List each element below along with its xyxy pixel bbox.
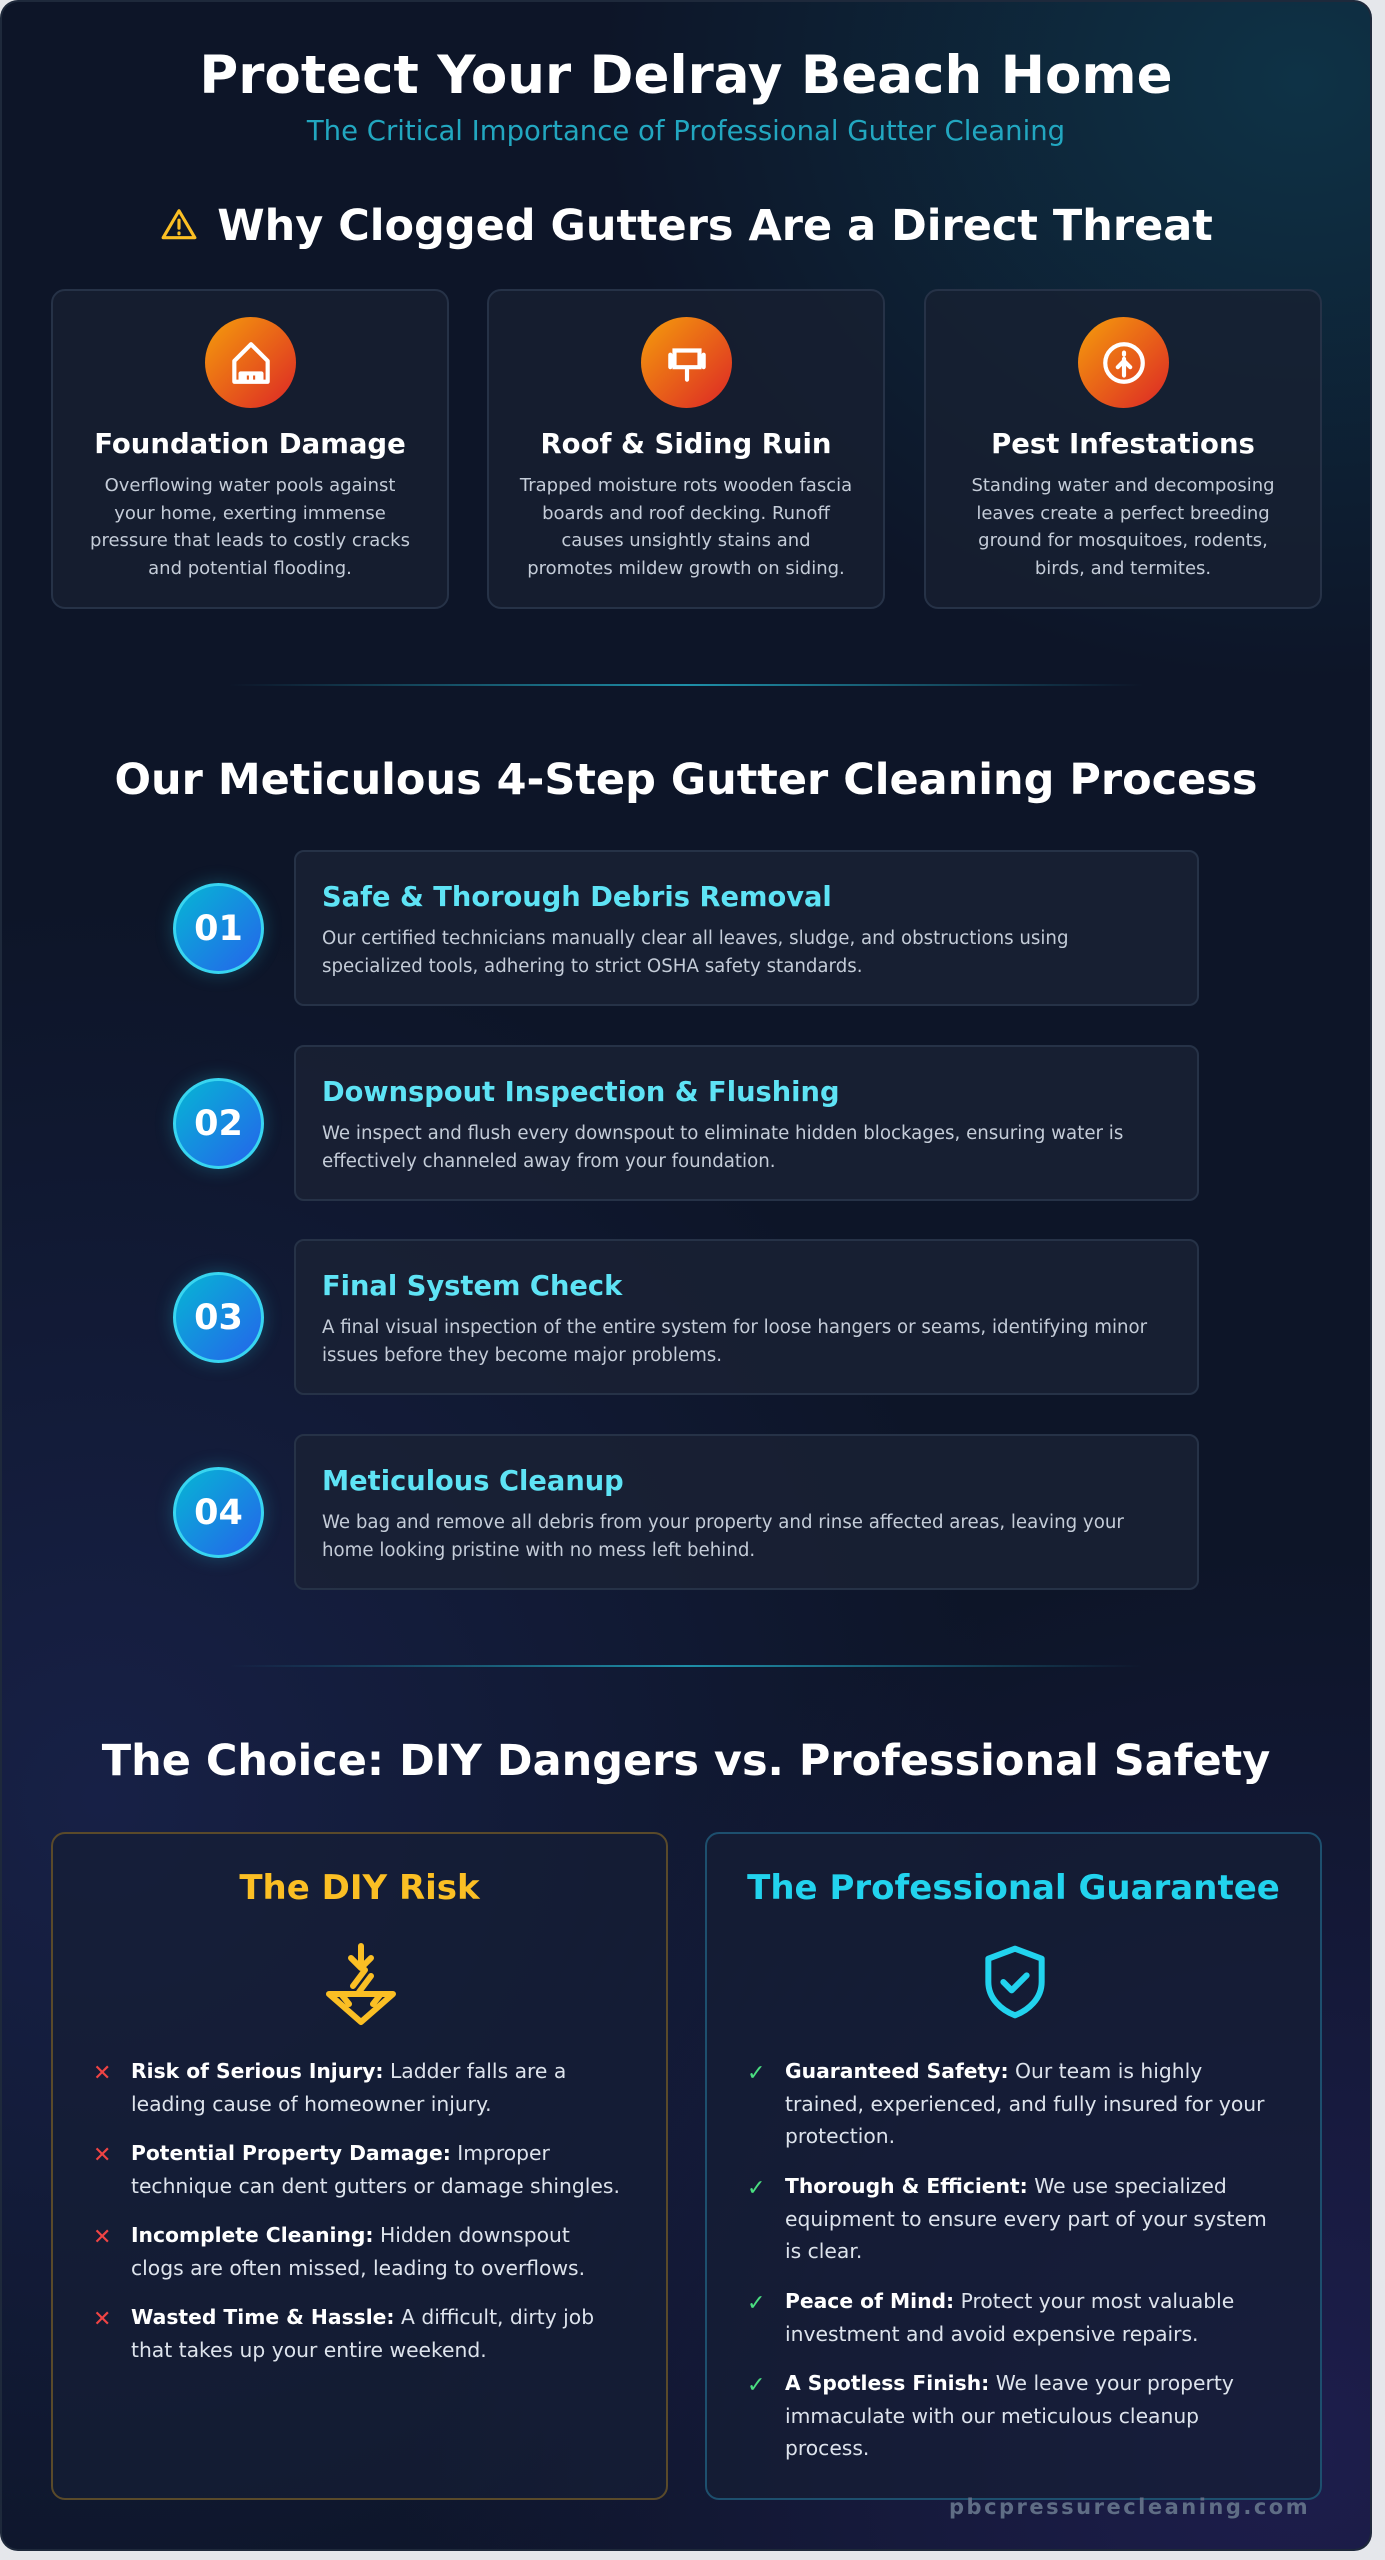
title: Protect Your Delray Beach Home: [199, 45, 1173, 106]
panel: professional guarantee: Thorough & Efficient: We use specialized equipment to ensure every part of your system is clear.: [785, 2174, 1267, 2263]
panel: pests: Standing water and decomposing leaves create a perfect breeding ground for mosquitoes, rodents, birds, and termites.: [971, 475, 1275, 579]
panel: professional guarantee: The Professional Guarantee: [747, 1868, 1280, 1908]
panel: DIY risk: Potential Property Damage: Improper technique can dent gutters or damage shingles.: [131, 2141, 620, 2198]
icon: house: [205, 317, 296, 408]
panel: professional guarantee: ✓: [747, 2291, 765, 2316]
panel: professional guarantee: ✓: [747, 2373, 765, 2398]
step 2: 02: [194, 1104, 243, 1144]
text: We inspect and flush every downspout to eliminate hidden blockages, ensuring water is effectively channeled away from your foundation.: [322, 1123, 1123, 1172]
step 4: 04: [194, 1492, 243, 1532]
text: Downspout Inspection & Flushing: [322, 1077, 840, 1108]
step 1: [173, 883, 264, 974]
panel: roof & siding: Roof & Siding Ruin: [540, 428, 832, 460]
panel: roof & siding: Trapped moisture rots wooden fascia boards and roof decking. Runoff causes unsightly stains and promotes mildew growth on siding.: [520, 475, 852, 579]
heading: process: Our Meticulous 4-Step Gutter Cleaning Process: [114, 755, 1258, 805]
text: Safe & Thorough Debris Removal: [322, 882, 832, 913]
panel: foundation damage: Overflowing water pools against your home, exerting immense pressure that leads to costly cracks and potential flooding.: [90, 475, 410, 579]
text: Meticulous Cleanup: [322, 1466, 624, 1497]
step 3: 03: [194, 1298, 243, 1338]
panel: DIY risk: ✕: [93, 2307, 111, 2332]
panel: professional guarantee: Guaranteed Safety: Our team is highly trained, experienced, and fully insured for your protection.: [785, 2059, 1264, 2148]
step 3: [173, 1272, 264, 1363]
text: A final visual inspection of the entire system for loose hangers or seams, identifying minor issues before they become major problems.: [322, 1317, 1147, 1366]
panel: DIY risk: ✕: [93, 2143, 111, 2168]
step 4: [173, 1467, 264, 1558]
text: Our certified technicians manually clear all leaves, sludge, and obstructions using specialized tools, adhering to strict OSHA safety standards.: [322, 928, 1069, 977]
panel: professional guarantee: ✓: [747, 2061, 765, 2086]
icon: falling ladder: [326, 1943, 396, 2026]
icon: pest: [1078, 317, 1169, 408]
icon: shield: [985, 1946, 1045, 2018]
panel: foundation damage: Foundation Damage: [94, 428, 406, 460]
panel: DIY risk: Wasted Time & Hassle: A difficult, dirty job that takes up your entire weekend.: [131, 2305, 594, 2362]
panel: DIY risk: ✕: [93, 2061, 111, 2086]
panel: professional guarantee: Peace of Mind: Protect your most valuable investment and avoid expensive repairs.: [785, 2289, 1234, 2346]
panel: DIY risk: The DIY Risk: [239, 1868, 480, 1908]
text: Final System Check: [322, 1271, 622, 1302]
panel: professional guarantee: A Spotless Finish: We leave your property immaculate with our meticulous cleanup process.: [785, 2371, 1234, 2460]
panel: DIY risk: Risk of Serious Injury: Ladder falls are a leading cause of homeowner injury.: [131, 2059, 566, 2116]
panel: professional guarantee: ✓: [747, 2176, 765, 2201]
panel: roof & siding: [487, 289, 885, 609]
icon: roof: [641, 317, 732, 408]
step 2: [173, 1078, 264, 1169]
step 1: 01: [194, 908, 243, 948]
heading: choice: The Choice: DIY Dangers vs. Professional Safety: [102, 1736, 1270, 1786]
panel: pests: [924, 289, 1322, 609]
panel: professional guarantee: [705, 1832, 1322, 2500]
panel: DIY risk: [51, 1832, 668, 2500]
subtitle: The Critical Importance of Professional Gutter Cleaning: [307, 115, 1065, 147]
watermark: pbcpressurecleaning.com: [949, 2495, 1310, 2519]
heading: threats: Why Clogged Gutters Are a Direct Threat: [217, 201, 1213, 251]
panel: DIY risk: Incomplete Cleaning: Hidden downspout clogs are often missed, leading to overflows.: [131, 2223, 585, 2280]
panel: pests: Pest Infestations: [991, 428, 1255, 460]
text: We bag and remove all debris from your property and rinse affected areas, leaving your home looking pristine with no mess left behind.: [322, 1512, 1124, 1561]
panel: foundation damage: [51, 289, 449, 609]
panel: DIY risk: ✕: [93, 2225, 111, 2250]
